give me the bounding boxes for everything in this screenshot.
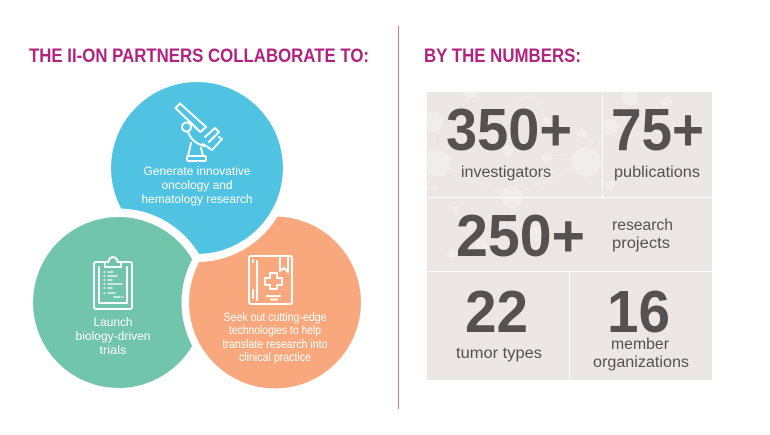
stat: 350+ investigators: 350+ bbox=[446, 97, 572, 163]
text: generate: oncology and bbox=[162, 178, 233, 192]
text: seek out: technologies to help bbox=[229, 323, 321, 337]
text: seek out bbox=[222, 310, 328, 364]
text: seek out: clinical practice bbox=[239, 350, 311, 364]
stat: 250+ research projects: 250+ bbox=[456, 203, 585, 269]
heading: by the numbers: BY THE NUMBERS: bbox=[424, 46, 581, 67]
icon: medical book bbox=[249, 256, 292, 304]
stat: 22 tumor types bbox=[456, 279, 542, 362]
stat: 250+ research projects bbox=[456, 203, 673, 269]
stat: 16 member organizations: member bbox=[611, 336, 669, 353]
text: launch bbox=[76, 315, 151, 357]
text: seek out: Seek out cutting-edge bbox=[224, 310, 327, 324]
icon: microscope bbox=[176, 104, 222, 161]
stat: 16 member organizations bbox=[593, 279, 689, 371]
stat: 75+ publications: 75+ bbox=[611, 97, 704, 163]
cell dividers bbox=[427, 92, 712, 380]
stat: 250+ research projects: research bbox=[612, 217, 673, 234]
stat: 22 tumor types: 22 bbox=[465, 279, 528, 345]
text: launch: biology-driven bbox=[76, 329, 151, 343]
panel: numbers bbox=[423, 78, 712, 380]
panel: blue circle bbox=[111, 82, 283, 254]
text: generate: Generate innovative bbox=[144, 164, 251, 178]
icon: clipboard bbox=[94, 257, 132, 309]
stat: 22 tumor types: tumor types bbox=[456, 345, 542, 362]
stat: 250+ research projects: projects bbox=[612, 235, 670, 252]
text: seek out: translate research into bbox=[222, 337, 328, 351]
text: generate bbox=[142, 164, 253, 206]
heading: collaborate: THE II-ON PARTNERS COLLABORATE TO: bbox=[29, 46, 369, 67]
text: launch: Launch bbox=[94, 315, 133, 329]
stat: 16 member organizations: organizations bbox=[593, 354, 689, 371]
center divider bbox=[398, 26, 399, 409]
panel: orange circle bbox=[189, 216, 361, 388]
panel: green circle bbox=[33, 217, 204, 388]
stat: 16 member organizations: 16 bbox=[607, 279, 670, 345]
text: generate: hematology research bbox=[142, 192, 253, 206]
text: launch: trials bbox=[100, 343, 126, 357]
stat: 350+ investigators: investigators bbox=[461, 164, 551, 181]
stat: 75+ publications: publications bbox=[614, 164, 700, 181]
